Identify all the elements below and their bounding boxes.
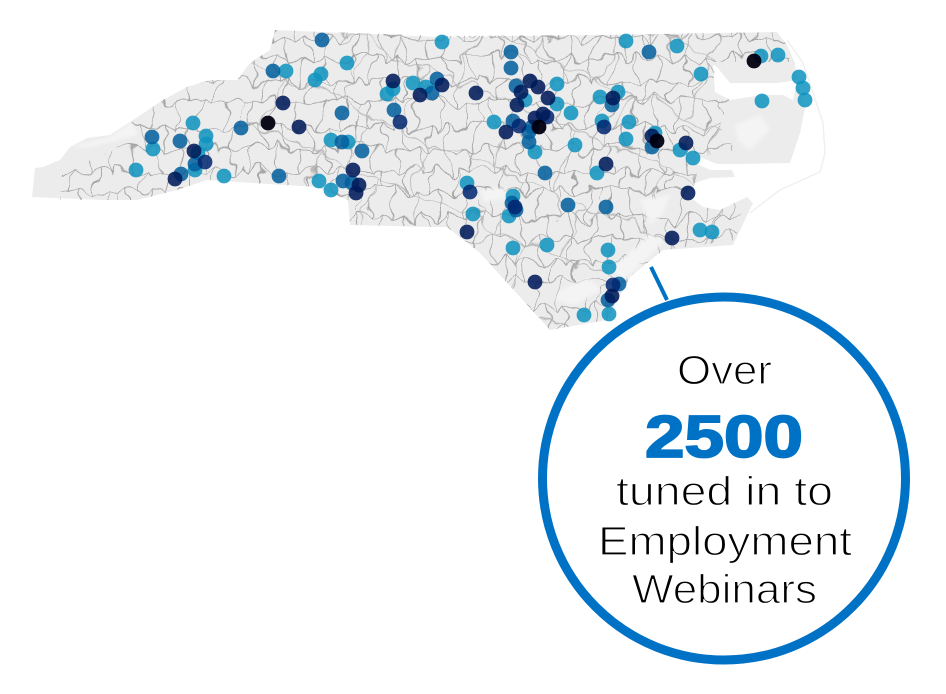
Albemarle Sound water [713,65,797,100]
light patches on the map [72,115,770,305]
text: 2500: 2500 [645,404,803,470]
text: tuned in to: tuned in to [616,468,833,514]
Outer Banks barrier islands [750,40,825,213]
text: Over: Over [677,347,772,393]
map: North Carolina counties and zip regions [30,20,830,340]
region boundaries mesh [60,30,790,330]
text: Employment: Employment [598,518,853,564]
attendee location dots [129,33,812,322]
callout text [598,347,853,612]
callout circle [542,297,906,660]
text: Webinars: Webinars [632,566,817,612]
state landmass [32,30,805,330]
callout connector line [651,267,667,300]
